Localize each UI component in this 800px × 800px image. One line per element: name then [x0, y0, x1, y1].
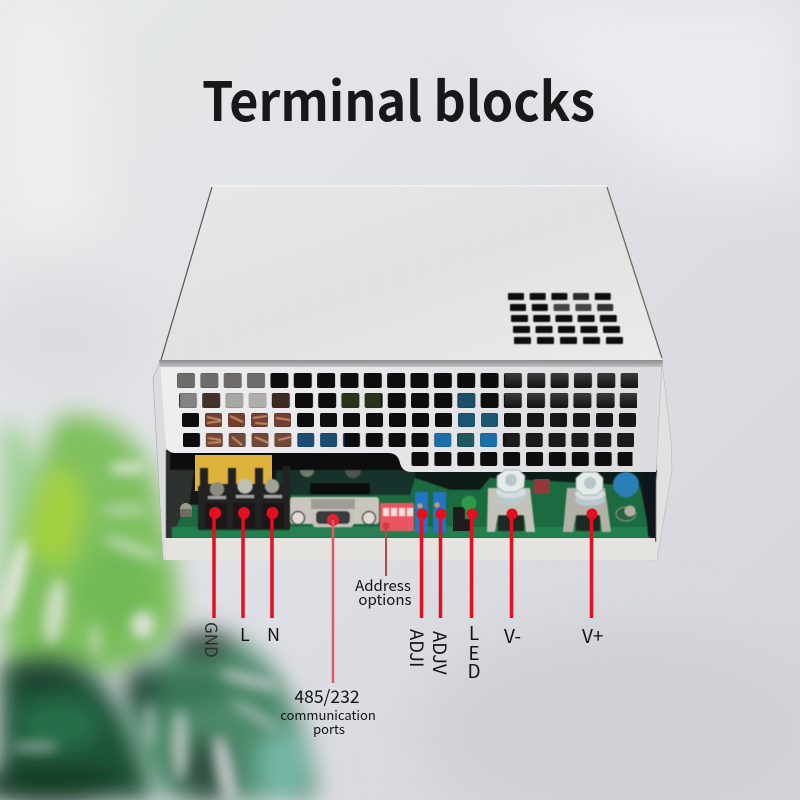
- gaps between light leaf fingers: [0, 462, 163, 658]
- callout lines and dots: [210, 508, 597, 683]
- label: ADJI: ADJI: [404, 629, 430, 667]
- gaps between second leaf fingers: [11, 666, 282, 800]
- label: L: L: [240, 621, 250, 647]
- address DIP switch: [380, 503, 414, 531]
- blurred plant leaves: [0, 415, 315, 800]
- label: Address: Address: [355, 575, 411, 596]
- label: LED: D: [467, 657, 481, 684]
- GND pointer: [210, 508, 220, 618]
- top cover edges: [161, 186, 662, 360]
- internal components seen through grille: [170, 370, 645, 470]
- 485/232 pointer: [328, 514, 338, 683]
- label: LED: [467, 619, 481, 684]
- label: ports: ports: [313, 719, 345, 738]
- label: ADJV: ADJV: [427, 631, 453, 675]
- top cover: [161, 186, 662, 360]
- V- output terminal: [487, 470, 535, 532]
- label: GND: GND: [200, 622, 225, 658]
- L pointer: [238, 508, 250, 618]
- address pointer: [383, 523, 389, 576]
- ADJI pointer: [417, 509, 427, 618]
- bottom lip: [165, 538, 657, 560]
- label: 485/232: 485/232: [294, 684, 360, 709]
- label: V-: V-: [504, 622, 521, 649]
- second monstera leaf: [124, 631, 315, 800]
- terminal labels: [200, 575, 603, 738]
- red capacitor: [534, 479, 550, 494]
- label: LED: E: [468, 639, 480, 666]
- label: options: options: [358, 589, 412, 610]
- black header: [453, 507, 471, 531]
- LED pointer: [467, 509, 477, 618]
- blue disc capacitor: [613, 472, 639, 521]
- yellow insulator: [195, 455, 272, 491]
- dark green leaf: [0, 658, 152, 800]
- interior cavity and circuit board: [166, 450, 657, 542]
- power supply unit: [153, 186, 672, 560]
- V+ output terminal: [563, 472, 611, 532]
- top bevel: [159, 360, 663, 367]
- terminal block: [198, 466, 290, 530]
- right side flange: [652, 362, 672, 560]
- front grille plate: [160, 367, 661, 472]
- label: V+: V+: [582, 622, 603, 649]
- N pointer: [267, 508, 278, 618]
- blue adjustment potentiometers: [415, 492, 446, 533]
- label: LED: L: [469, 619, 479, 646]
- left side flange: [153, 362, 168, 560]
- label: communication: communication: [280, 705, 376, 724]
- green LED: [462, 496, 476, 519]
- V- pointer: [507, 509, 517, 618]
- top vent slots: [508, 293, 623, 344]
- ADJV pointer: [436, 509, 446, 618]
- V+ pointer: [587, 509, 597, 618]
- D-sub communication port: [290, 497, 380, 536]
- small board screw: [180, 503, 192, 517]
- title: Terminal blocks: [202, 58, 595, 137]
- light green leaf: [0, 415, 180, 680]
- label: N: N: [267, 621, 280, 647]
